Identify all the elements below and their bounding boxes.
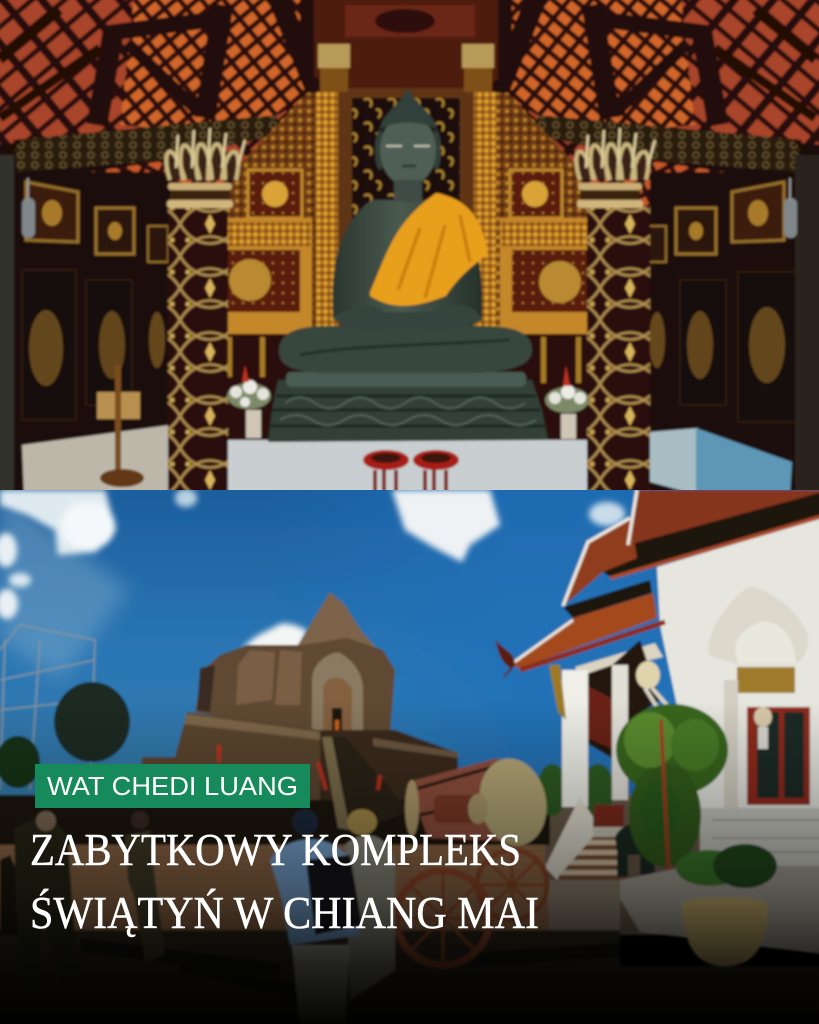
ground backdrop: [544, 794, 702, 936]
white floor band: [225, 440, 590, 495]
garden shrub and pot: [540, 704, 819, 966]
dark bottom gradient: [0, 700, 819, 1024]
chedi: [140, 592, 458, 832]
steps and naga: [544, 798, 624, 881]
roof lattice and beams, right: [485, 0, 819, 210]
label badge: Wat Chedi Luang: [35, 764, 310, 808]
sky: [0, 490, 819, 797]
label badge: Wat Chedi Luang: WAT CHEDI LUANG: [47, 771, 298, 801]
roof lattice and beams, left: [0, 0, 330, 210]
title: ŚWIĄTYŃ W CHIANG MAI: [30, 887, 539, 938]
temple building: [495, 490, 819, 870]
red offering stools: [363, 450, 459, 495]
clouds: [0, 489, 625, 680]
scaffold: [0, 625, 95, 790]
golden back wall left: [222, 92, 340, 340]
photo: Buddha hall interior: [0, 0, 819, 500]
lower altar wall: [227, 334, 588, 440]
central gable: [300, 0, 512, 92]
ground: [0, 845, 550, 935]
flower offerings: [227, 365, 589, 439]
pillars: [166, 128, 655, 495]
photo: Wat Chedi Luang exterior: [0, 480, 819, 1024]
visitors: [14, 809, 395, 1024]
drum cart: [396, 752, 554, 965]
title: ZABYTKOWY KOMPLEKS: [30, 824, 521, 875]
trees: [0, 682, 614, 816]
central niche: [318, 44, 494, 348]
bronze elephant: [615, 823, 655, 877]
side wall right: [648, 155, 819, 495]
title: [30, 824, 539, 938]
side wall left: [0, 155, 170, 495]
golden back wall right: [470, 92, 592, 340]
Buddha statue: [268, 88, 548, 442]
